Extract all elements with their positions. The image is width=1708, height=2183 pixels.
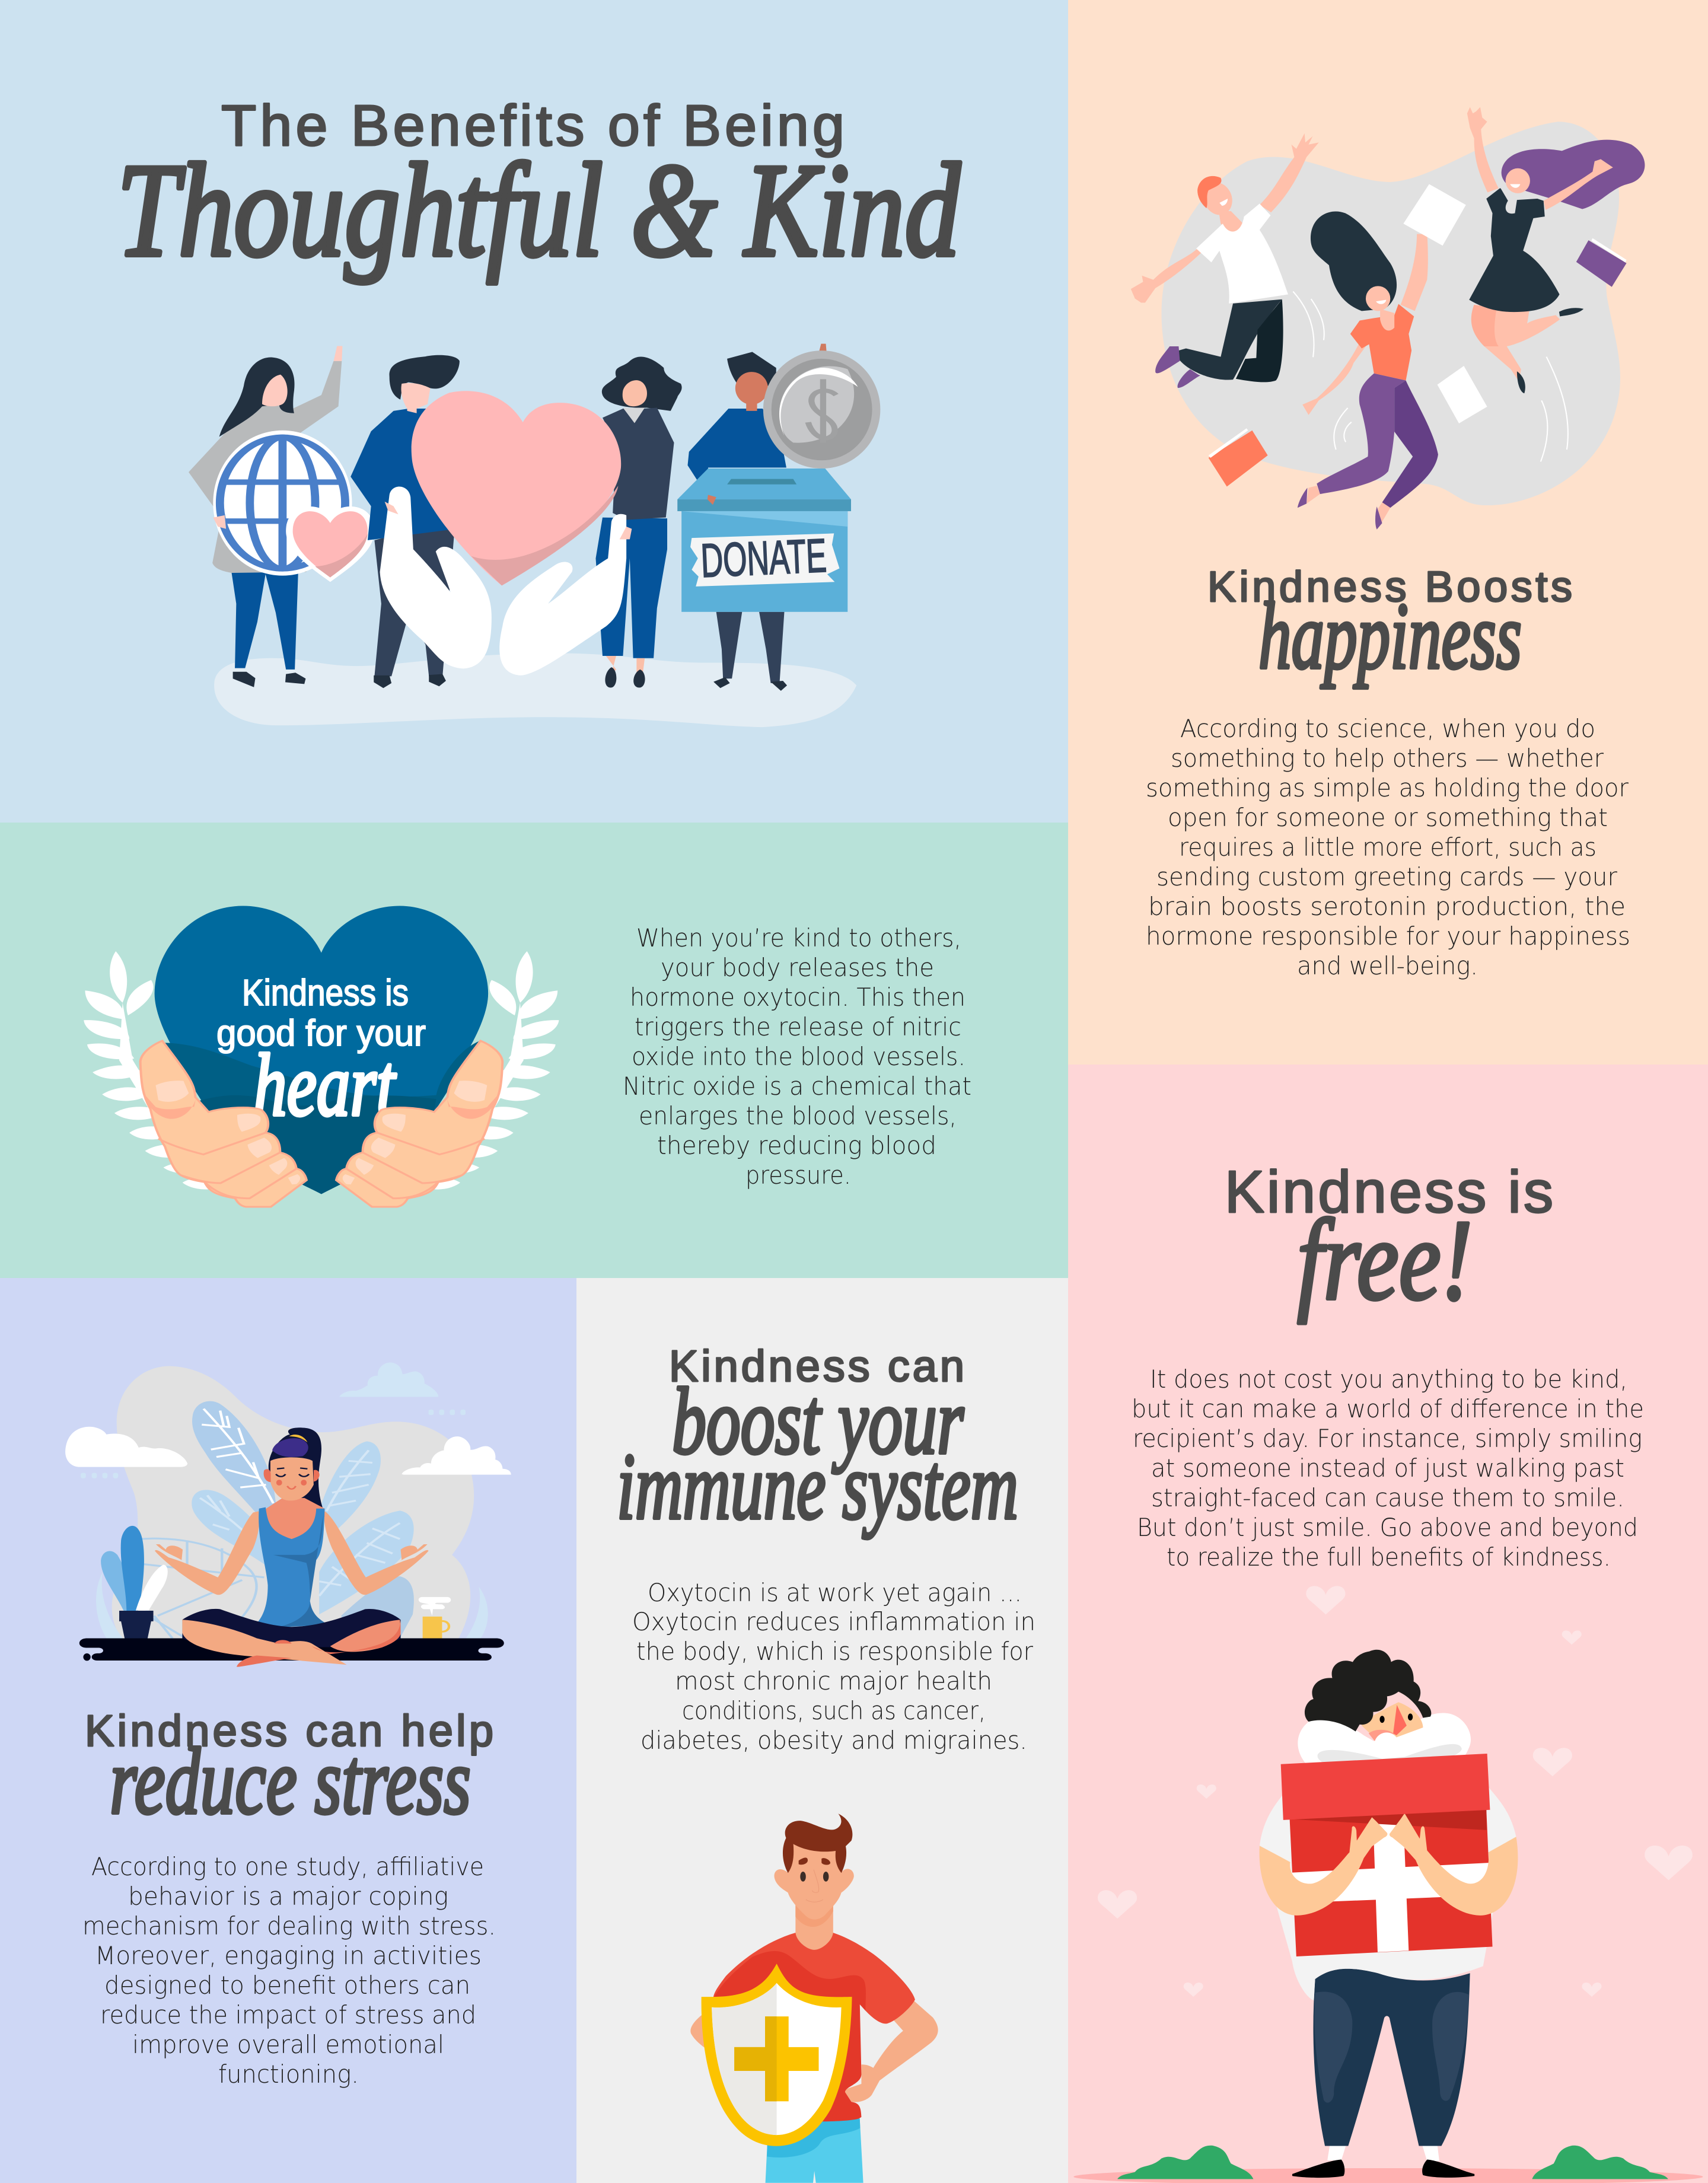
illustration: man with gift (1073, 1586, 1703, 2183)
face (270, 1457, 314, 1500)
sans heading: Kindness is (1225, 1159, 1553, 1225)
shield (702, 1964, 852, 2146)
hair (269, 1427, 323, 1509)
paragraph: stress: improve overall emotional (132, 2030, 444, 2059)
paragraph: heart (623, 923, 971, 1190)
paragraph: free: But don’t just smile. Go above and beyond (1137, 1513, 1638, 1542)
paragraph: immune: diabetes, obesity and migraines. (640, 1726, 1027, 1755)
woman in black dress (1467, 107, 1645, 393)
paragraph: heart: pressure. (745, 1161, 851, 1190)
outline leaf (129, 1538, 264, 1638)
paragraph: heart: When you’re kind to others, (636, 923, 961, 952)
gift box base (1289, 1809, 1493, 1956)
sans heading: Kindness Boosts (1207, 563, 1572, 611)
sans heading: Kindness can (669, 1341, 964, 1391)
shirt (713, 1933, 915, 2023)
big heart (412, 391, 621, 585)
white hands (380, 487, 626, 675)
ground (214, 654, 856, 727)
gift bow (1298, 1713, 1471, 1767)
paragraph: heart: your body releases the (661, 953, 934, 982)
paragraph: happiness: brain boosts serotonin production, the (1148, 892, 1626, 921)
script line 1: boost your (672, 1368, 964, 1474)
ground (1073, 2168, 1703, 2183)
panel: free background (1068, 1065, 1708, 2183)
woman in orange (1298, 212, 1438, 530)
heading: kindness is free (1225, 1159, 1553, 1324)
neck (795, 1901, 833, 1950)
bow shadow (1317, 1744, 1462, 1764)
neck (264, 1498, 324, 1539)
paragraph: immune: most chronic major health (675, 1666, 992, 1696)
paragraph: happiness: open for someone or something that (1168, 803, 1608, 832)
illustration: people donating (189, 344, 880, 727)
paragraph: immune (632, 1578, 1035, 1755)
hair and face (1305, 1650, 1431, 1743)
arms (1260, 1814, 1518, 1916)
illustration: man with shield (690, 1814, 938, 2183)
script heading: free! (1297, 1196, 1473, 1324)
panel: immune background (576, 1278, 1068, 2183)
heading: kindness can help reduce stress (85, 1706, 493, 1834)
paragraph: free: It does not cost you anything to be kind, (1150, 1365, 1627, 1394)
paragraph: stress: functioning. (218, 2060, 359, 2089)
plant (101, 1526, 168, 1639)
paragraph: happiness: According to science, when you do (1180, 714, 1595, 743)
sans heading: Kindness can help (85, 1706, 493, 1755)
paragraph: free: to realize the full benefits of kindness. (1167, 1543, 1611, 1572)
hands holding heart (141, 1041, 502, 1207)
illustration: laurel and blue heart (84, 906, 559, 1194)
paragraph: stress: Moreover, engaging in activities (95, 1941, 482, 1970)
man with donate box (687, 352, 787, 691)
donate label text: DONATE (700, 529, 828, 587)
heading: kindness boosts happiness (1207, 563, 1572, 689)
paragraph: immune: Oxytocin is at work yet again ... (648, 1578, 1022, 1607)
laurel leaves (84, 951, 559, 1190)
leaf veins (202, 1408, 273, 1503)
illustration: jumping people (1131, 107, 1645, 530)
man behind big heart (350, 355, 460, 688)
paragraph: happiness: and well-being. (1297, 951, 1478, 980)
paragraph: heart: enlarges the blood vessels, (639, 1101, 957, 1130)
paragraph: stress: mechanism for dealing with stress. (82, 1911, 496, 1940)
heart shadow (165, 1041, 480, 1194)
panel: stress background (0, 1278, 576, 2183)
hand accents (385, 502, 632, 539)
clouds (65, 1427, 511, 1475)
paragraph: free (1132, 1365, 1644, 1572)
paragraph: heart: hormone oxytocin. This then (630, 983, 965, 1012)
paragraph: stress: reduce the impact of stress and (100, 2000, 476, 2029)
illustration: meditating woman (65, 1362, 511, 1667)
paragraph: heart: triggers the release of nitric (635, 1012, 961, 1041)
paragraph: happiness: hormone responsible for your happiness (1146, 922, 1630, 951)
script line 2: immune system (617, 1433, 1018, 1539)
panel: heart background (0, 823, 1068, 1278)
man in white shirt (1131, 133, 1319, 388)
paragraph: stress: According to one study, affiliative (91, 1852, 484, 1881)
paragraph: stress: behavior is a major coping (128, 1882, 448, 1911)
paragraph: immune: conditions, such as cancer, (682, 1696, 986, 1725)
paragraph: free: but it can make a world of difference in the (1132, 1394, 1644, 1423)
title (117, 93, 961, 284)
motion lines (1293, 291, 1568, 461)
woman with globe (189, 346, 374, 687)
paragraph: heart: oxide into the blood vessels. (632, 1042, 965, 1071)
mug (419, 1597, 451, 1638)
legs (182, 1609, 401, 1647)
paragraph: happiness: something to help others — whether (1171, 744, 1604, 773)
right hand (336, 1041, 502, 1207)
script word: heart (253, 1036, 396, 1134)
trousers (766, 2120, 863, 2183)
paragraph: free: straight-faced can cause them to smile. (1151, 1483, 1624, 1512)
paragraph: heart: thereby reducing blood (657, 1131, 936, 1160)
title script line: Thoughtful & Kind (117, 136, 961, 284)
trousers (1313, 1969, 1470, 2146)
heart label text: good for your (216, 1013, 426, 1054)
background blob (1161, 122, 1620, 505)
paragraph: free: at someone instead of just walking past (1151, 1454, 1624, 1483)
paragraph: heart: Nitric oxide is a chemical that (623, 1072, 971, 1101)
shirt (1260, 1788, 1516, 2000)
blue heart (155, 906, 488, 1194)
paragraph: happiness: sending custom greeting cards — your (1156, 862, 1618, 891)
paragraph: happiness: something as simple as holding the door (1146, 773, 1629, 802)
paragraph: happiness (1146, 714, 1630, 980)
small dots (81, 1410, 466, 1478)
bushes (1117, 2146, 1668, 2179)
flying books and papers (1209, 184, 1627, 486)
paragraph: immune: Oxytocin reduces inflammation in (632, 1607, 1035, 1636)
panel: title background (0, 0, 1068, 823)
large leaves (192, 1401, 277, 1514)
label lines: Kindness is (242, 973, 409, 1014)
paragraph: immune: the body, which is responsible for (636, 1637, 1034, 1666)
script heading: happiness (1258, 583, 1522, 689)
coin (763, 344, 880, 469)
heart label text (216, 973, 426, 1134)
donate box (677, 469, 851, 612)
head (775, 1843, 854, 1920)
floor bar (79, 1638, 504, 1661)
title line 1: The Benefits of Being (221, 93, 845, 158)
big heart shadow (471, 486, 618, 585)
woman arms (155, 1511, 259, 1595)
left hand (141, 1041, 307, 1207)
paragraph: stress: designed to benefit others can (104, 1971, 470, 2000)
tank top (253, 1507, 329, 1627)
background blob (112, 1366, 474, 1638)
paragraph: free: recipient’s day. For instance, simply smiling (1133, 1424, 1642, 1453)
floating hearts (1098, 1586, 1693, 1997)
paragraph: happiness: requires a little more effort, such as (1179, 833, 1597, 862)
arms (690, 2001, 938, 2102)
gift box lid (1281, 1754, 1490, 1820)
socks and shoes (1327, 2145, 1439, 2161)
woman in navy (595, 357, 682, 688)
heading: kindness can boost your immune system (617, 1341, 1018, 1539)
paragraph: stress (82, 1852, 496, 2089)
pale side leaves (96, 1572, 488, 1638)
script heading: reduce stress (110, 1728, 471, 1834)
panel: happiness background (1068, 0, 1708, 1065)
